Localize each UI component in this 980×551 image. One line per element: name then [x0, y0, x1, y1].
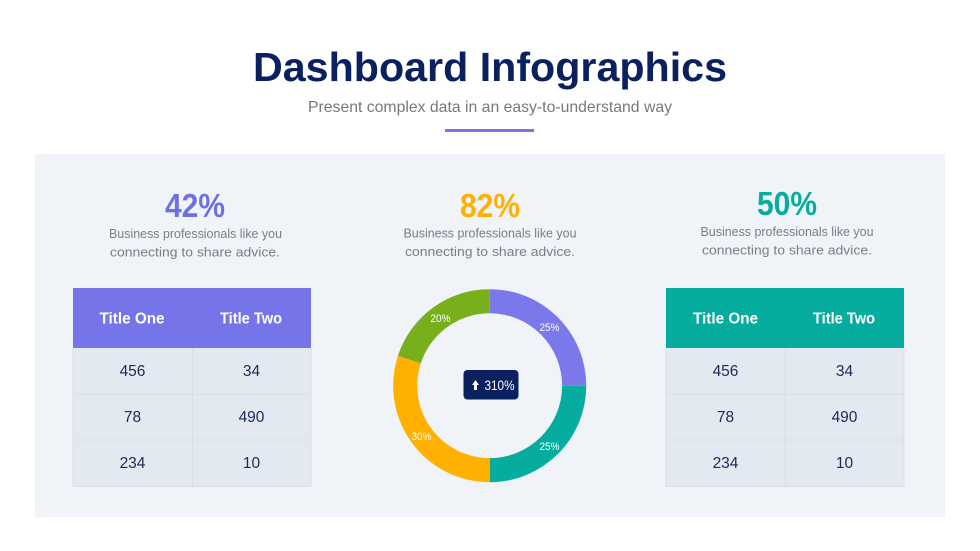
- panel: center statistic: [404, 187, 576, 259]
- description: Business professionals like you: [109, 226, 282, 241]
- panel: right statistic: [700, 185, 874, 258]
- title: Dashboard Infographics: [253, 44, 727, 90]
- segment: green 20%: [398, 289, 490, 363]
- table values: 78: [717, 409, 734, 426]
- table values: 456: [120, 363, 145, 380]
- table header: [73, 288, 311, 348]
- title underline: [445, 129, 534, 132]
- table values: 234: [120, 455, 146, 472]
- left table: [73, 288, 311, 486]
- table values: 10: [243, 455, 260, 472]
- right table: [666, 288, 904, 486]
- description: connecting to share advice.: [702, 242, 872, 258]
- table values: 490: [832, 409, 858, 426]
- table header: Title Two: [220, 310, 282, 328]
- stat: 82%: 82%: [460, 187, 520, 224]
- stat: 42%: 42%: [165, 187, 225, 224]
- description: connecting to share advice.: [405, 244, 575, 259]
- table values: 234: [713, 455, 739, 472]
- icon: up arrow: [472, 380, 479, 390]
- panel: dashboard background: [35, 154, 945, 517]
- table values: 490: [239, 409, 265, 426]
- table header: [666, 288, 904, 348]
- center badge: 310%: [484, 377, 514, 393]
- donut labels: 25%: [540, 441, 560, 453]
- table header: Title One: [693, 310, 758, 328]
- donut labels: [412, 313, 560, 453]
- table values: [120, 363, 265, 472]
- center badge: [464, 370, 518, 400]
- segment: purple 25%: [490, 289, 586, 386]
- table values: 10: [836, 455, 853, 472]
- table values: 78: [124, 409, 141, 426]
- table values: 34: [836, 363, 853, 380]
- description: connecting to share advice.: [110, 244, 280, 260]
- table values: 456: [713, 363, 738, 380]
- segment: teal 25%: [490, 386, 586, 482]
- table header: Title Two: [813, 310, 875, 328]
- description: Business professionals like you: [700, 224, 874, 239]
- donut chart: [393, 289, 586, 482]
- table header: Title One: [100, 310, 165, 328]
- table values: 34: [243, 363, 260, 380]
- donut labels: 25%: [540, 322, 560, 334]
- description: [404, 226, 576, 259]
- panel: left statistic: [109, 187, 282, 260]
- donut labels: 30%: [412, 431, 432, 443]
- stat: 50%: 50%: [757, 185, 817, 222]
- subtitle: Present complex data in an easy-to-understand way: [308, 99, 672, 116]
- donut labels: 20%: [430, 313, 451, 325]
- description: [109, 226, 282, 260]
- description: [700, 224, 874, 258]
- description: Business professionals like you: [404, 226, 576, 240]
- table values: [713, 363, 858, 472]
- segment: orange 30%: [393, 356, 490, 482]
